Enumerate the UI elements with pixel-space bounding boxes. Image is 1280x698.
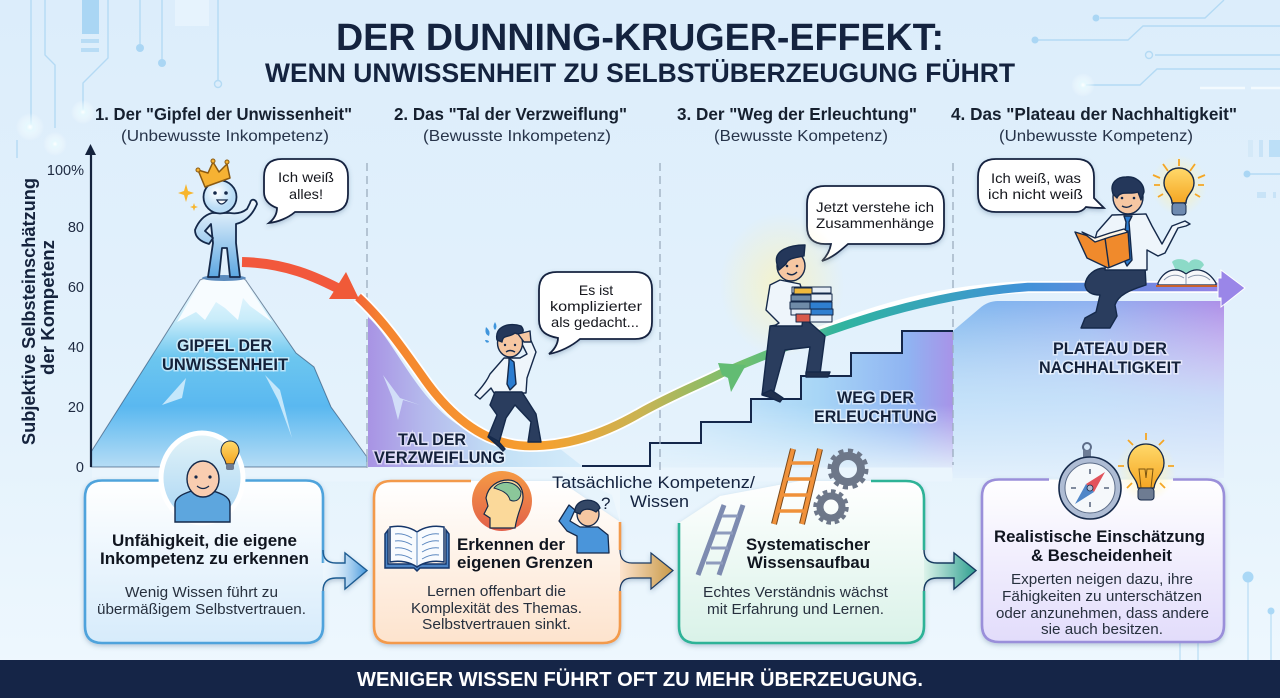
lower band covering chart base	[92, 468, 952, 482]
figure 3: climbing man with books	[762, 245, 833, 402]
icon: confused person: ?	[601, 494, 610, 513]
card 2 text: Lernen offenbart die	[427, 584, 566, 600]
card 1 text: übermäßigem Selbstvertrauen.	[97, 602, 306, 618]
card 1 text: Wenig Wissen führt zu	[125, 585, 278, 601]
card 3 text: mit Erfahrung und Lernen.	[707, 602, 884, 618]
card 2 text: eigenen Grenzen	[457, 554, 593, 572]
figure 4: man reading on plateau	[1075, 177, 1190, 328]
card 3: Systematischer Wissensaufbau	[679, 449, 976, 643]
icon: sweat drops	[485, 322, 496, 343]
card 1 text: Inkompetenz zu erkennen	[100, 550, 309, 568]
footer banner: WENIGER WISSEN FÜHRT OFT ZU MEHR ÜBERZEUGUNG.	[357, 668, 923, 691]
heading: stage 2: 2. Das "Tal der Verzweiflung"	[394, 104, 627, 124]
circuit decoration: top left	[16, 0, 222, 158]
card 4 text: Experten neigen dazu, ihre	[1011, 572, 1193, 588]
label: Gipfel der Unwissenheit: UNWISSENHEIT	[162, 356, 288, 374]
heading: stage 3	[677, 104, 917, 145]
circuit decoration: top right	[1032, 0, 1280, 198]
y axis ticks: 80	[68, 220, 84, 236]
caption: Tatsächliche Kompetenz: Tatsächliche Kompetenz/	[552, 474, 755, 492]
card 3 text: Systematischer	[746, 536, 871, 554]
valley area: Tal der Verzweiflung	[368, 317, 582, 467]
card 4 text: oder anzunehmen, dass andere	[996, 606, 1209, 622]
icon: grey ladder	[698, 505, 743, 575]
card 2 text: Selbstvertrauen sinkt.	[422, 617, 571, 633]
speech bubble: Es ist komplizierter: Es ist	[579, 282, 613, 298]
area behind question person	[472, 467, 620, 522]
icon: compass	[1059, 443, 1121, 519]
y axis label	[19, 178, 58, 445]
icon: orange book	[1075, 229, 1130, 268]
label: Gipfel der Unwissenheit	[162, 337, 288, 374]
speech bubble: Es ist komplizierter	[539, 272, 652, 354]
card 3 text: Wissensaufbau	[747, 554, 870, 572]
y axis ticks: 40	[68, 340, 84, 356]
label: Gipfel der Unwissenheit: GIPFEL DER	[177, 337, 272, 355]
speech bubble: Ich weiß alles: alles!	[289, 186, 323, 202]
heading: stage 3: 3. Der "Weg der Erleuchtung"	[677, 104, 917, 124]
card 2 text: Komplexität des Themas.	[411, 601, 582, 617]
heading: stage 2: (Bewusste Inkompetenz)	[423, 128, 611, 145]
speech bubble: Ich weiß alles: Ich weiß	[278, 169, 334, 185]
icon: open book on plateau	[1156, 259, 1217, 286]
heading: stage 4	[951, 104, 1237, 145]
arrow: purple end	[1218, 270, 1245, 307]
icon: orange ladder	[774, 449, 820, 524]
y axis ticks: 20	[68, 400, 84, 416]
card 4 text: sie auch besitzen.	[1041, 622, 1163, 638]
speech bubble: Es ist komplizierter: als gedacht...	[551, 314, 639, 330]
heading: stage 1: (Unbewusste Inkompetenz)	[121, 128, 329, 145]
icon: sparkles	[178, 184, 198, 211]
speech bubble: Es ist komplizierter: komplizierter	[550, 298, 642, 314]
title	[265, 17, 1015, 88]
card 3 frame	[679, 481, 976, 643]
icon: crown	[196, 159, 230, 187]
label: Plateau der Nachhaltigkeit: NACHHALTIGKEIT	[1039, 359, 1181, 377]
card 2 frame	[374, 481, 673, 643]
y axis label: der Kompetenz	[38, 240, 58, 375]
y axis ticks: 0	[76, 460, 84, 476]
speech bubble: Ich weiß, was	[978, 159, 1104, 212]
card 3 text	[703, 536, 888, 618]
figure 1: confident stick man with crown	[178, 159, 257, 281]
icon: gears	[816, 451, 866, 522]
card 2 text: Erkennen der	[457, 536, 566, 554]
icon: light bulb stage 4	[1151, 155, 1207, 215]
caption: Tatsächliche Kompetenz: Wissen	[630, 493, 689, 511]
heading: stage 1: 1. Der "Gipfel der Unwissenheit"	[95, 104, 352, 124]
circuit decoration: bottom right	[1180, 572, 1274, 660]
label: Weg der Erleuchtung: WEG DER	[837, 389, 914, 407]
label: Weg der Erleuchtung: ERLEUCHTUNG	[814, 408, 937, 426]
label: Tal der Verzweiflung: VERZWEIFLUNG	[374, 449, 505, 467]
card 4 text: Fähigkeiten zu unterschätzen	[1002, 589, 1202, 605]
y axis label: Subjektive Selbsteinschätzung	[19, 178, 39, 445]
y axis ticks: 60	[68, 280, 84, 296]
card 3 text: Echtes Verständnis wächst	[703, 585, 888, 601]
y axis arrow	[85, 144, 96, 467]
card 4: Realistische Einschätzung	[982, 433, 1224, 642]
title: DER DUNNING-KRUGER-EFFEKT:	[336, 17, 944, 59]
card 1 frame	[85, 480, 367, 643]
card 4 frame	[982, 480, 1224, 642]
plateau: Nachhaltigkeit	[953, 301, 1224, 478]
title: WENN UNWISSENHEIT ZU SELBSTÜBERZEUGUNG FÜHRT	[265, 58, 1015, 88]
y axis ticks: 100%	[47, 163, 84, 179]
glow behind climber	[720, 213, 844, 357]
speech bubble: Ich weiß, was: ich nicht weiß	[988, 186, 1083, 202]
label: Plateau der Nachhaltigkeit	[1039, 340, 1181, 377]
speech bubble: Jetzt verstehe ich	[807, 186, 944, 261]
heading: stage 2	[394, 104, 627, 145]
icon: person with bulb	[161, 433, 243, 523]
competence curve	[242, 262, 1245, 446]
label: Weg der Erleuchtung	[814, 389, 937, 426]
heading: stage 1	[95, 104, 352, 145]
arrow: green midpoint	[718, 363, 746, 392]
card 4 text: & Bescheidenheit	[1031, 547, 1172, 565]
figure 2: worried man	[475, 322, 541, 451]
card 2: Erkennen der eigenen Grenzen	[374, 467, 673, 643]
footer banner	[0, 660, 1280, 698]
icon: light bulb	[1116, 433, 1176, 502]
staircase: Weg der Erleuchtung	[582, 331, 953, 475]
icon: open book	[385, 526, 449, 571]
stage dividers	[367, 163, 953, 470]
icon: book stack	[790, 287, 833, 322]
card 2 text	[411, 536, 593, 633]
heading: stage 4: 4. Das "Plateau der Nachhaltigkeit"	[951, 104, 1237, 124]
icon: head with brain	[472, 471, 532, 531]
arrow: red start	[242, 262, 359, 299]
card 4 text	[994, 528, 1209, 638]
label: Tal der Verzweiflung: TAL DER	[398, 431, 466, 449]
label: Tal der Verzweiflung	[374, 431, 505, 467]
speech bubble: Jetzt verstehe ich: Zusammenhänge	[816, 215, 934, 231]
card 4 text: Realistische Einschätzung	[994, 528, 1205, 546]
card 1 text: Unfähigkeit, die eigene	[112, 532, 297, 550]
heading: stage 4: (Unbewusste Kompetenz)	[999, 128, 1193, 145]
icon: confused person	[559, 494, 610, 553]
speech bubble: Ich weiß alles	[264, 159, 348, 223]
label: Plateau der Nachhaltigkeit: PLATEAU DER	[1053, 340, 1167, 358]
card 1 text	[97, 532, 309, 618]
caption: Tatsächliche Kompetenz	[552, 474, 755, 511]
y axis ticks	[47, 163, 84, 476]
mountain: Gipfel der Unwissenheit	[91, 278, 367, 467]
card 1: Unfähigkeit	[85, 433, 367, 643]
speech bubble: Jetzt verstehe ich: Jetzt verstehe ich	[816, 199, 934, 215]
speech bubble: Ich weiß, was: Ich weiß, was	[991, 170, 1081, 186]
heading: stage 3: (Bewusste Kompetenz)	[714, 128, 888, 145]
